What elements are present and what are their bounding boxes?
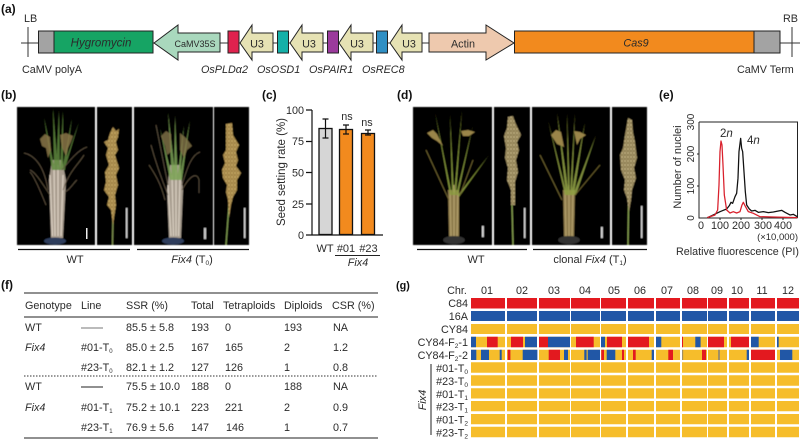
photo: Fix4 plant	[134, 107, 213, 245]
panel label a: (a)	[1, 2, 16, 16]
row Fix4 23 T0: 0.8	[333, 362, 348, 374]
row WT T1: 0	[225, 381, 231, 393]
row Fix4 23 T1: 76.9 ± 5.6	[126, 422, 174, 434]
CaMV terminator box	[754, 31, 780, 53]
panel label b: (b)	[1, 88, 16, 102]
row C84	[471, 298, 799, 308]
label Fix4 T0: )	[209, 254, 213, 266]
U3 arrow 3: U3	[350, 38, 364, 50]
CaMV polyA box	[38, 31, 54, 53]
row WT T0: 193	[191, 322, 209, 334]
construct annotations: CaMV polyA	[22, 64, 83, 76]
Fix4 bracket: Fix4	[348, 257, 368, 269]
dotted separator	[24, 375, 378, 377]
table header: CSR (%)	[332, 300, 375, 312]
Fix4 bracket: Fix4	[417, 390, 429, 410]
x tick labels: 100	[711, 220, 729, 232]
y axis title: Number of nuclei	[672, 125, 684, 209]
Fix4 bracket	[335, 256, 380, 269]
row 16A	[471, 311, 799, 321]
row WT T0: NA	[333, 322, 349, 334]
bar line 23	[362, 130, 374, 234]
row Fix4 23 T1	[81, 422, 348, 435]
chromosome header: 09	[711, 285, 723, 297]
row labels: CY84-F	[418, 350, 455, 362]
row labels: 1	[464, 395, 468, 402]
Actin promoter arrow: Actin	[451, 38, 475, 50]
row WT T1: NA	[333, 381, 349, 393]
row Fix4 01 T0	[25, 342, 348, 355]
chromosome header: 07	[661, 285, 673, 297]
label Fix4 T0: 0	[205, 260, 209, 267]
significance labels: ns	[341, 111, 353, 123]
row labels: 0	[464, 369, 468, 376]
row Fix4 23 T0	[81, 362, 348, 375]
construct annotations: OsPAIR1	[309, 64, 353, 76]
construct annotations: OsOSD1	[257, 64, 300, 76]
U3 arrow 4	[390, 25, 422, 60]
x axis title: Relative fluorescence (PI)	[676, 246, 799, 258]
table header: Diploids	[284, 300, 323, 312]
panel: plants WT and clonal Fix4 T1 (d)	[397, 88, 647, 267]
chromosome header: 04	[579, 285, 591, 297]
Hygromycin gene: Hygromycin	[71, 38, 131, 50]
chromosome header: 02	[516, 285, 528, 297]
row Fix4 23 T1: 0.7	[333, 422, 348, 434]
table header	[25, 300, 375, 312]
chromosome header: 06	[634, 285, 646, 297]
row labels: 2	[455, 356, 459, 363]
row Fix4 01 T1: Fix4	[25, 402, 45, 414]
bar WT	[319, 119, 332, 234]
bar line 01	[340, 125, 352, 234]
table rules	[24, 293, 378, 438]
y tick labels: 100	[686, 177, 697, 194]
label WT: WT	[66, 254, 84, 266]
row Fix4 01 T0: 0	[109, 349, 113, 355]
OsOSD1 target	[278, 31, 288, 53]
Actin promoter arrow	[429, 25, 514, 60]
row WT T1	[25, 381, 349, 393]
CaMV35S promoter arrow: CaMV35S	[174, 39, 216, 49]
row Fix4 01 T1: 1	[109, 409, 113, 415]
yellow rows CY84 through T2	[471, 324, 799, 437]
row WT T0: WT	[25, 322, 42, 334]
row labels: #01-T	[436, 389, 464, 401]
row Fix4 23 T0: 1	[284, 362, 290, 374]
label clonal Fix4 T1: clonal Fix4 (T	[553, 254, 619, 266]
histogram curves	[707, 138, 797, 218]
label clonal Fix4 T1: )	[623, 254, 627, 266]
row labels: CY84-F	[418, 337, 455, 349]
row Fix4 01 T0: 165	[225, 342, 243, 354]
label clonal Fix4 T1: 1	[619, 260, 623, 267]
tick labels	[286, 105, 304, 242]
row WT T1: 188	[284, 381, 302, 393]
row labels: 2	[455, 343, 459, 350]
row WT T1: 188	[191, 381, 209, 393]
row Fix4 01 T1: 75.2 ± 10.1	[126, 402, 180, 414]
row WT T0: 0	[225, 322, 231, 334]
y tick labels: 200	[686, 145, 697, 162]
row Fix4 23 T1: 1	[284, 422, 290, 434]
construct annotations	[22, 64, 794, 76]
row WT T0	[25, 322, 349, 334]
significance labels: ns	[361, 117, 373, 129]
label Fix4 T0: Fix4 (T	[171, 254, 205, 266]
photo: WT panicle	[494, 107, 530, 245]
row Fix4 23 T0: 0	[109, 369, 113, 375]
photo: WT panicle	[97, 107, 132, 245]
y tick labels: 0	[686, 215, 697, 221]
chromosome header: 11	[756, 285, 768, 297]
row Fix4 01 T0: 167	[191, 342, 209, 354]
panel label e: (e)	[659, 88, 674, 102]
red 2n curve	[707, 141, 797, 218]
x tick labels: 300	[754, 220, 772, 232]
y axis title: Seed setting rate (%)	[276, 118, 288, 226]
row labels: 2	[464, 420, 468, 428]
row Fix4 01 T1: 0.9	[333, 402, 348, 414]
row Fix4 23 T1: 1	[109, 429, 113, 435]
U3 arrow 2: U3	[302, 38, 316, 50]
x tick labels	[698, 220, 792, 232]
axes	[306, 110, 383, 236]
photo: clonal Fix4 plant	[532, 107, 610, 245]
row WT T1: WT	[25, 381, 42, 393]
chromosome header: 03	[548, 285, 560, 297]
row Fix4 23 T1: 147	[191, 422, 209, 434]
row WT T1: 75.5 ± 10.0	[126, 381, 180, 393]
U3 arrow 2	[290, 25, 323, 60]
Hygromycin gene	[54, 31, 153, 53]
panel label f: (f)	[1, 278, 13, 292]
peak labels: 2n	[720, 128, 733, 140]
x tick labels: 200	[732, 220, 750, 232]
panel: genotype heatmap (g)	[396, 280, 799, 440]
black 4n curve	[707, 138, 797, 218]
row Fix4 23 T1: #23-T	[81, 422, 109, 434]
left border label: LB	[24, 13, 37, 25]
photo: clonal Fix4 panicle	[612, 107, 647, 245]
row Fix4 01 T1: 2	[284, 402, 290, 414]
plot frame	[697, 122, 798, 220]
row Fix4 23 T0: 126	[225, 362, 243, 374]
row labels: 1	[464, 408, 468, 414]
scale bar WT plant	[86, 228, 88, 239]
construct annotations: CaMV Term	[737, 64, 794, 76]
table header: Line	[81, 300, 101, 312]
row labels: 2	[464, 434, 468, 440]
photo: WT plant	[17, 107, 95, 245]
row labels: -2	[458, 350, 468, 362]
table header: Tetraploids	[223, 300, 276, 312]
row WT T0: 85.5 ± 5.8	[126, 322, 174, 334]
table header: SSR (%)	[126, 300, 168, 312]
row WT T0: 193	[284, 322, 302, 334]
panel: bar chart seed setting rate (c)	[262, 88, 383, 269]
U3 arrow 4: U3	[402, 38, 416, 50]
tick labels: 75	[292, 136, 304, 148]
row labels: #01-T	[436, 414, 464, 426]
OsPLD target	[228, 31, 239, 53]
y tick labels	[686, 113, 697, 221]
chromosome header: Chr.	[447, 285, 467, 297]
Cas9 gene: Cas9	[623, 38, 649, 50]
row Fix4 01 T1: #01-T	[81, 402, 109, 414]
row labels: 16A	[449, 311, 469, 323]
row labels: 0	[464, 382, 468, 389]
x scale note: (×10,000)	[757, 232, 798, 243]
x tick labels: 0	[698, 220, 704, 232]
group lines	[18, 248, 249, 250]
chromosome header: 08	[687, 285, 699, 297]
row labels: #23-T	[436, 428, 464, 440]
panel: flow cytometry chart (e)	[659, 88, 799, 258]
tick labels: 50	[292, 168, 304, 180]
peak labels: 4n	[747, 135, 760, 147]
construct annotations: OsPLDα2	[201, 64, 248, 76]
backbone line	[21, 27, 800, 57]
row labels: #23-T	[436, 402, 464, 414]
tick labels: 0	[298, 230, 304, 242]
row labels: CY84	[441, 324, 468, 336]
group lines	[417, 248, 647, 250]
chromosome header	[447, 285, 794, 297]
table header: Total	[191, 300, 214, 312]
panel label g: (g)	[396, 280, 410, 292]
panel: plants WT and Fix4 T0 (b)	[1, 88, 249, 267]
table header: Genotype	[25, 300, 72, 312]
CaMV35S promoter arrow	[154, 25, 220, 60]
y tick labels: 300	[686, 113, 697, 130]
Cas9 gene	[514, 31, 754, 53]
row Fix4 23 T0: #23-T	[81, 362, 109, 374]
CY84-F2-1 segments	[471, 337, 779, 347]
construct annotations: OsREC8	[362, 64, 405, 76]
U3 arrow 1: U3	[250, 38, 264, 50]
row Fix4 01 T1: 223	[191, 402, 209, 414]
CY84-F2-2 segments	[471, 350, 792, 360]
panel: construct map (a)	[1, 2, 800, 76]
chromosome header: 01	[481, 285, 493, 297]
row labels: C84	[448, 298, 468, 310]
panel label d: (d)	[397, 88, 412, 102]
row Fix4 01 T0: 85.0 ± 2.5	[126, 342, 174, 354]
row labels	[418, 298, 469, 440]
row labels: -1	[458, 337, 468, 349]
row Fix4 01 T1	[25, 402, 348, 415]
row Fix4 23 T1: 146	[226, 422, 244, 434]
label WT: WT	[467, 254, 485, 266]
row Fix4 01 T0: 2	[284, 342, 290, 354]
x tick labels: 400	[774, 220, 792, 232]
tick labels: 25	[292, 199, 304, 211]
peak labels	[720, 128, 760, 147]
row labels: #23-T	[436, 376, 464, 388]
row Fix4 01 T1: 221	[225, 402, 243, 414]
photo: Fix4 panicle	[214, 107, 249, 245]
x labels: #23	[359, 243, 378, 255]
panel label c: (c)	[262, 88, 277, 102]
OsPAIR1 target	[328, 31, 338, 53]
chromosome header: 12	[782, 285, 794, 297]
x labels: WT	[316, 243, 334, 255]
tick labels: 100	[286, 105, 304, 117]
chromosome header: 05	[608, 285, 620, 297]
row Fix4 23 T0: 127	[191, 362, 209, 374]
chromosome header: 10	[731, 285, 743, 297]
x labels: #01	[337, 243, 355, 255]
panel: data table (f)	[1, 278, 378, 438]
OsREC8 target	[376, 31, 388, 53]
x labels	[316, 243, 378, 255]
significance labels	[341, 111, 373, 129]
row Fix4 23 T0: 82.1 ± 1.2	[126, 362, 174, 374]
U3 arrow 1	[240, 25, 273, 60]
row Fix4 01 T0: 1.2	[333, 342, 348, 354]
Fix4 bracket	[417, 364, 431, 435]
row Fix4 01 T0: Fix4	[25, 342, 45, 354]
U3 arrow 3	[339, 25, 373, 60]
photo: WT plant	[413, 107, 492, 245]
right border label: RB	[783, 13, 798, 25]
row Fix4 01 T0: #01-T	[81, 342, 109, 354]
row labels: #01-T	[436, 363, 464, 375]
